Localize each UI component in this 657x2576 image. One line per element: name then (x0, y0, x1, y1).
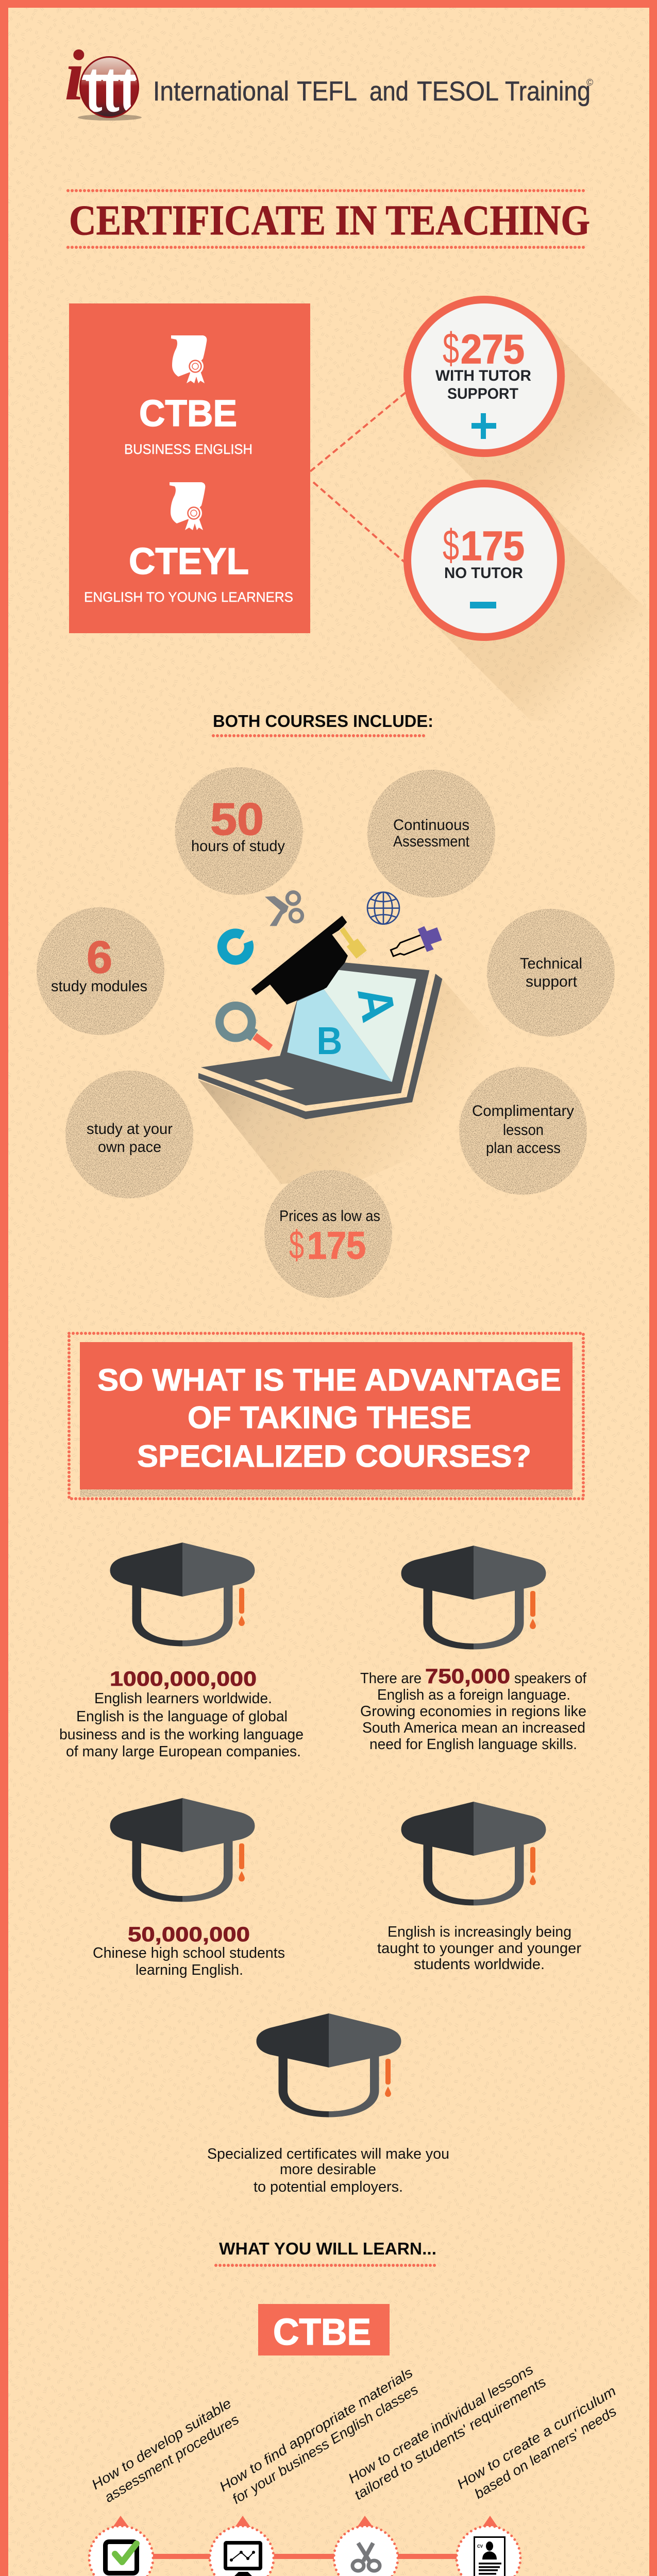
rotated learning labels: CTBE: How to create a curriculum (454, 2383, 619, 2492)
feature circle: study at your own pace (65, 1071, 193, 1198)
text: specialized certificates: Specialized certificates will make you (207, 2146, 449, 2162)
text: 750,000 speakers: 750,000 (425, 1665, 510, 1688)
letter A on screen: A (347, 982, 406, 1026)
text: younger students: students worldwide. (414, 1956, 545, 1973)
rotated learning labels: CTBE: tailored to students' requirements (351, 2374, 549, 2503)
laptop (198, 962, 442, 1119)
CTEYL subtitle: ENGLISH TO YOUNG LEARNERS (84, 589, 293, 605)
text: 1000,000,000 English learners (59, 1668, 304, 1760)
logo: ITTT International TEFL and TESOL Training (66, 49, 593, 121)
logo: ITTT International TEFL and TESOL Training: International (153, 76, 289, 107)
rotated learning labels: CTBE: for your business English classes (229, 2382, 421, 2507)
logo: ITTT International TEFL and TESOL Training: and (369, 76, 409, 107)
text: 1000,000,000 English learners: 1000,000,000 (110, 1668, 257, 1690)
text: specialized certificates (207, 2146, 449, 2195)
text: younger students: taught to younger and younger (377, 1940, 581, 1957)
text: 750,000 speakers: There are (360, 1670, 422, 1687)
price circle: $175 no tutor: NO TUTOR (444, 565, 523, 582)
feature circle: complimentary lesson plan access: Complimentary (472, 1103, 574, 1120)
text: 1000,000,000 English learners: business and is the working language (59, 1726, 304, 1743)
heading: what you will learn: WHAT YOU WILL LEARN... (219, 2239, 436, 2258)
feature circle: 50 hours of study: hours of study (191, 838, 285, 855)
letter B on screen: B (316, 1019, 342, 1062)
title: certificate in teaching: CERTIFICATE IN TEACHING (69, 196, 590, 244)
icon: scissors (265, 892, 302, 926)
feature circle: continuous assessment: Assessment (393, 833, 470, 850)
panel: advantage heading (69, 1333, 583, 1499)
text: 1000,000,000 English learners: of many large European companies. (66, 1743, 301, 1760)
CTBE course name: CTBE (139, 393, 237, 434)
rotated learning labels: CTBE: How to develop suitable (89, 2396, 234, 2493)
rotated learning labels: CTBE: How to find appropriate materials (216, 2365, 415, 2495)
icon: graduation cap (251, 916, 348, 1005)
price circle: $175 no tutor (407, 483, 561, 637)
text: 50,000,000 Chinese students (93, 1923, 285, 1978)
text: 750,000 speakers: Growing economies in regions like (360, 1703, 586, 1720)
feature circle: 50 hours of study: 50 (210, 793, 264, 844)
rotated learning labels: CTBE: How to create individual lessons (345, 2362, 536, 2486)
icon: globe (367, 892, 399, 924)
icon: certificate scroll CTEYL (170, 482, 205, 530)
icon: magnifying glass (220, 1006, 273, 1050)
logo: ITTT International TEFL and TESOL Training: TEFL (297, 76, 357, 107)
timeline: CTBE (89, 2516, 520, 2576)
feature circle: technical support: Technical (520, 955, 582, 972)
logo: ITTT International TEFL and TESOL Training: ttt (85, 46, 137, 128)
rotated learning labels: CTBE (89, 2362, 619, 2507)
feature circle: 50 hours of study (175, 767, 303, 895)
feature circle: study at your own pace: study at your (87, 1121, 173, 1138)
badge: CTBE (258, 2304, 390, 2355)
text: 1000,000,000 English learners: English learners worldwide. (94, 1690, 272, 1707)
text: 750,000 speakers: speakers of (514, 1670, 587, 1687)
feature circle: complimentary lesson plan access (459, 1067, 587, 1195)
feature circle: 6 study modules (37, 907, 164, 1035)
feature circle: complimentary lesson plan access: plan access (486, 1140, 561, 1157)
logo: ITTT International TEFL and TESOL Training: Training (505, 76, 591, 107)
badge: CTBE: CTBE (273, 2312, 371, 2353)
feature circle: continuous assessment: Continuous (393, 817, 469, 834)
text: specialized certificates: more desirable (280, 2161, 376, 2178)
heading: both courses include: BOTH COURSES INCLUDE: (213, 711, 433, 731)
panel: course names (69, 303, 310, 633)
panel: advantage heading: SPECIALIZED COURSES? (137, 1439, 531, 1473)
icon: mortarboard 2 (401, 1546, 546, 1650)
feature circle: technical support: support (526, 973, 578, 990)
text: younger students (377, 1924, 581, 1973)
icon: monitor chart (226, 2543, 261, 2576)
feature circle: prices as low as $175 (264, 1170, 392, 1298)
feature circle: 6 study modules: 6 (87, 931, 112, 982)
feature circle: technical support (487, 909, 615, 1037)
price circle: $275 with tutor support: $ (443, 324, 459, 372)
icon: CV page: CV (477, 2544, 483, 2549)
feature circle: 6 study modules: study modules (51, 978, 147, 995)
icon: certificate scroll CTBE (171, 335, 207, 383)
CTBE subtitle: BUSINESS ENGLISH (124, 442, 252, 457)
feature circle: prices as low as $175: Prices as low as (279, 1208, 380, 1225)
rotated learning labels: CTBE: based on learners' needs (471, 2403, 619, 2502)
icon: mortarboard 3 (110, 1798, 255, 1902)
price circle: $275 with tutor support (407, 300, 561, 453)
text: 750,000 speakers: South America mean an increased (362, 1720, 585, 1736)
icon: tassel (340, 927, 367, 959)
logo: ITTT International TEFL and TESOL Training: TESOL (417, 76, 499, 107)
icon: mortarboard 5 (257, 2013, 401, 2117)
text: 1000,000,000 English learners: English is the language of global (76, 1708, 288, 1725)
icon: dropper (391, 926, 442, 956)
feature circle: continuous assessment (367, 770, 495, 897)
text: younger students: English is increasingly being (388, 1924, 571, 1940)
feature circle: complimentary lesson plan access: lesson (503, 1122, 544, 1139)
illustration: laptop with graduation cap and school icons (198, 892, 442, 1119)
price circle: $275 with tutor support: WITH TUTOR (435, 367, 531, 384)
icon: checklist (105, 2542, 137, 2573)
logo: ITTT International TEFL and TESOL Training: © (586, 77, 593, 88)
price circle: $275 with tutor support: 275 (461, 326, 525, 372)
feature circle: prices as low as $175: 175 (307, 1224, 366, 1267)
price circle: $275 with tutor support: SUPPORT (447, 385, 518, 402)
dashed connectors (310, 393, 406, 562)
CTEYL course name: CTEYL (129, 541, 249, 582)
text: 50,000,000 Chinese students: Chinese high school students (93, 1945, 285, 1961)
text: 750,000 speakers (360, 1665, 587, 1753)
feature circle: prices as low as $175: $ (289, 1222, 304, 1267)
panel: advantage heading: SO WHAT IS THE ADVANTAGE (97, 1363, 561, 1397)
price circle: $175 no tutor: $ (443, 521, 459, 569)
text: 50,000,000 Chinese students: 50,000,000 (128, 1923, 250, 1946)
laptop shadow (198, 979, 508, 1184)
price circle: $175 no tutor: 175 (461, 523, 525, 569)
rotated learning labels: CTBE: assessment procedures (102, 2412, 242, 2505)
panel: advantage heading: OF TAKING THESE (188, 1400, 471, 1435)
feature circle: study at your own pace: own pace (98, 1139, 161, 1156)
long shadow behind price circles (427, 319, 649, 721)
logo: ITTT International TEFL and TESOL Training: i (64, 36, 85, 115)
icon: CV page (474, 2537, 505, 2576)
text: specialized certificates: to potential employers. (254, 2179, 403, 2195)
text: 50,000,000 Chinese students: learning English. (136, 1962, 243, 1978)
icon: mortarboard 1 (110, 1543, 255, 1647)
icon: cyan C ring (222, 934, 249, 960)
icon: scissors (352, 2543, 380, 2571)
text: 750,000 speakers: need for English language skills. (369, 1736, 577, 1753)
text: 750,000 speakers: English as a foreign language. (377, 1687, 570, 1703)
icon: mortarboard 4 (401, 1802, 546, 1905)
